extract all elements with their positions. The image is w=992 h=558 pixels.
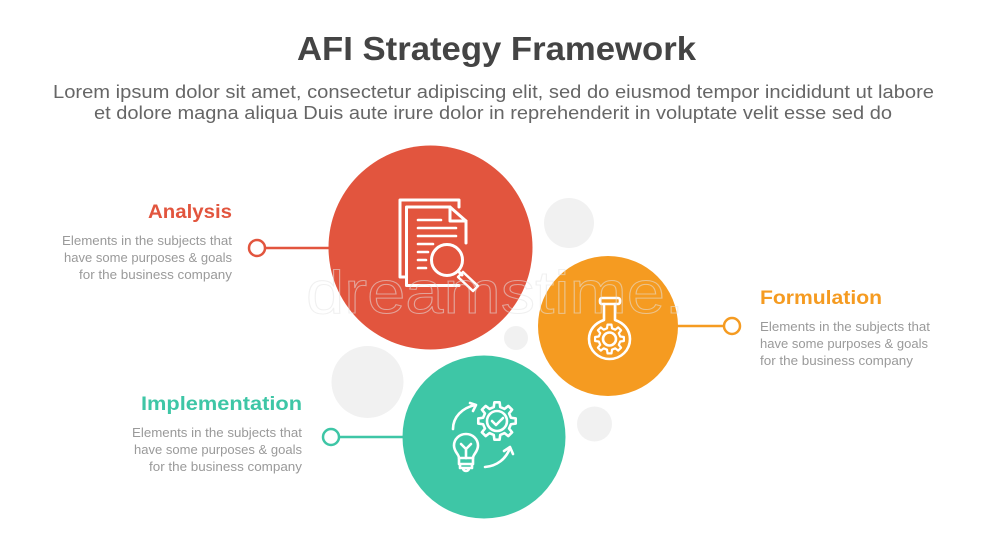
subtitle text: et dolore magna aliqua Duis aute irure dolor in reprehenderit in voluptate velit esse sed do bbox=[94, 103, 892, 123]
description: formulation: for the business company bbox=[760, 354, 914, 368]
description: implementation bbox=[132, 426, 303, 474]
title: AFI Strategy Framework bbox=[297, 30, 697, 67]
description: analysis: Elements in the subjects that bbox=[62, 234, 233, 248]
decorative grey bubbles bbox=[332, 198, 612, 442]
watermark: dreamstime. bbox=[306, 259, 684, 326]
description: implementation: for the business company bbox=[149, 460, 303, 474]
icon: flask with gear bbox=[589, 298, 630, 359]
subtitle text: Lorem ipsum dolor sit amet, consectetur adipiscing elit, sed do eiusmod tempor incididunt ut labore bbox=[53, 82, 934, 102]
heading: analysis: Analysis bbox=[148, 202, 232, 223]
icon: document with magnifier bbox=[400, 200, 478, 291]
circle: formulation bbox=[538, 256, 678, 396]
circle: implementation bbox=[402, 356, 566, 518]
text block: implementation bbox=[132, 394, 303, 474]
description: formulation: have some purposes & goals bbox=[760, 337, 928, 351]
description: formulation bbox=[760, 320, 931, 368]
description: formulation: Elements in the subjects that bbox=[760, 320, 931, 334]
description: analysis bbox=[62, 234, 233, 282]
subtitle text bbox=[53, 82, 934, 123]
description: implementation: have some purposes & goals bbox=[134, 443, 302, 457]
description: implementation: Elements in the subjects that bbox=[132, 426, 303, 440]
connector: implementation bbox=[323, 429, 406, 445]
description: analysis: for the business company bbox=[79, 268, 233, 282]
connector: formulation bbox=[676, 318, 740, 334]
circle: analysis bbox=[328, 146, 532, 350]
heading: formulation: Formulation bbox=[760, 288, 882, 309]
text block: formulation bbox=[760, 288, 931, 368]
text block: analysis bbox=[62, 202, 233, 282]
icon: bulb, gear and arrows bbox=[453, 402, 516, 471]
connector: analysis bbox=[249, 240, 332, 256]
description: analysis: have some purposes & goals bbox=[64, 251, 232, 265]
heading: implementation: Implementation bbox=[141, 394, 302, 415]
